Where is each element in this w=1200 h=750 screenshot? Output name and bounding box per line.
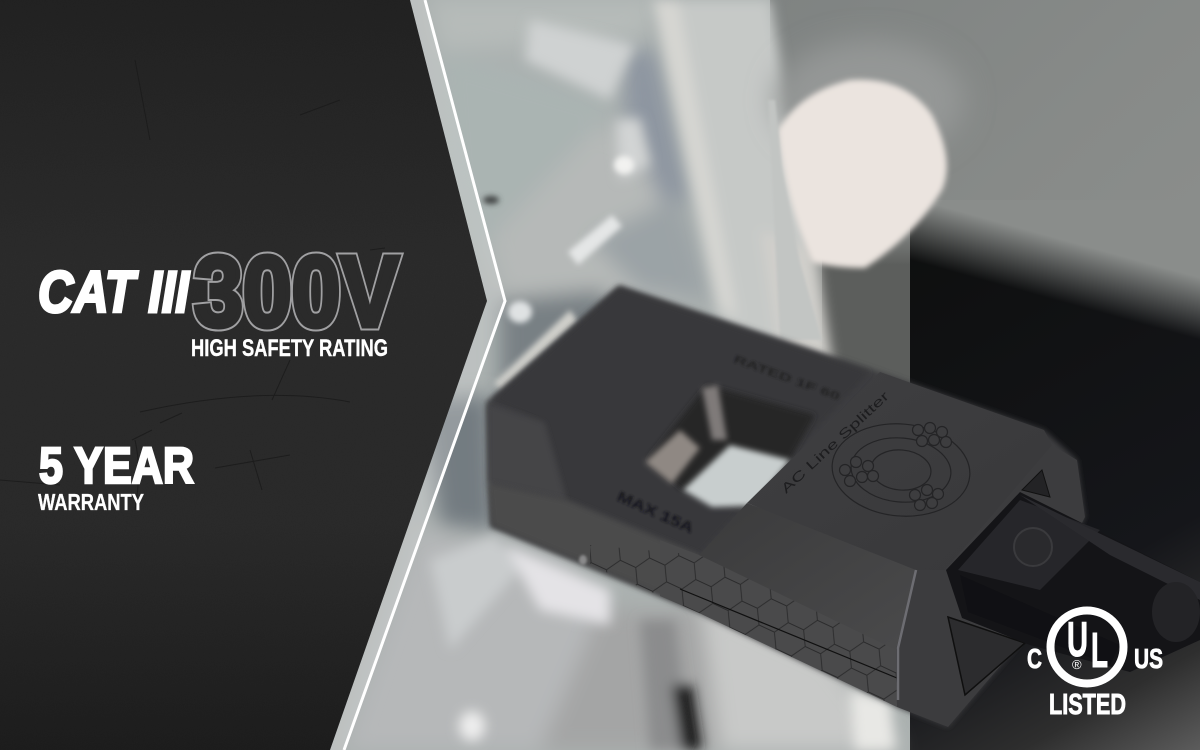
- heading: 5 year: 5 YEAR: [39, 437, 194, 494]
- icon: UL listed mark: [1027, 610, 1163, 721]
- device: upper main block top: [747, 372, 1052, 570]
- device: edge highlight: [898, 570, 916, 700]
- heading: 300V outlined: 300V: [194, 236, 399, 348]
- text: high safety rating: HIGH SAFETY RATING: [191, 335, 388, 362]
- registered mark: ®: [1072, 657, 1082, 672]
- device: lower side band, sharp part: [660, 540, 897, 707]
- UL ring: [1050, 610, 1124, 684]
- device: embossed label upper: RATED 1F 60: [732, 354, 841, 403]
- photo: dark background lower right: [910, 200, 1200, 750]
- device: left end face: [488, 404, 566, 500]
- device: embossed label MAX 15A: MAX 15A: [614, 488, 696, 537]
- text: warranty: WARRANTY: [38, 489, 144, 515]
- letters US: US: [1134, 643, 1163, 674]
- heading: 300V outlined: 300V: [194, 236, 399, 348]
- UL letter L: L: [1091, 624, 1108, 678]
- photo: vertical metal rail: [652, 0, 835, 380]
- photo: bright highlights on bracket: [483, 156, 634, 392]
- device: embossed label AC Line Splitter: AC Line Splitter: [778, 388, 893, 496]
- UL letter U: U: [1067, 613, 1088, 667]
- device: light speck on band: [579, 555, 587, 565]
- photo: blurred metal lower left: [345, 395, 900, 750]
- device: recessed triangular end panel: [948, 617, 1025, 695]
- panel: grunge texture: [0, 60, 385, 510]
- device: upper end panel outline: [1022, 470, 1050, 497]
- photo: AC line splitter device: [486, 285, 1200, 727]
- word LISTED: LISTED: [1049, 689, 1126, 721]
- device: overall silhouette: [486, 285, 1085, 727]
- photo: soft metal shapes upper left: [430, 0, 710, 400]
- photo: grey shadow column between rail and dark area: [822, 225, 910, 390]
- device: block front face: [699, 503, 916, 650]
- device: window opening with metal behind: [645, 385, 815, 507]
- device: right end face: [896, 445, 1085, 727]
- device: power cord plug: [946, 492, 1200, 672]
- background photo: blurred metal rail and splitter device: [330, 0, 1200, 750]
- device: hexagon pattern: [590, 540, 900, 710]
- translucent chevron band beside panel: [320, 0, 505, 750]
- device: embossed logo: [828, 418, 974, 522]
- photo: grey upper-right backdrop: [770, 0, 1200, 400]
- device: lower side band, left blurred part: [488, 483, 700, 610]
- heading: CAT III: CAT III: [38, 260, 191, 325]
- dark chevron panel: [0, 0, 490, 750]
- device: left top face (blurred): [492, 288, 870, 555]
- white chevron outline: [344, 0, 505, 750]
- letter C: C: [1027, 643, 1042, 674]
- device: seam line: [680, 589, 897, 678]
- photo: blurred white post head: [768, 40, 965, 340]
